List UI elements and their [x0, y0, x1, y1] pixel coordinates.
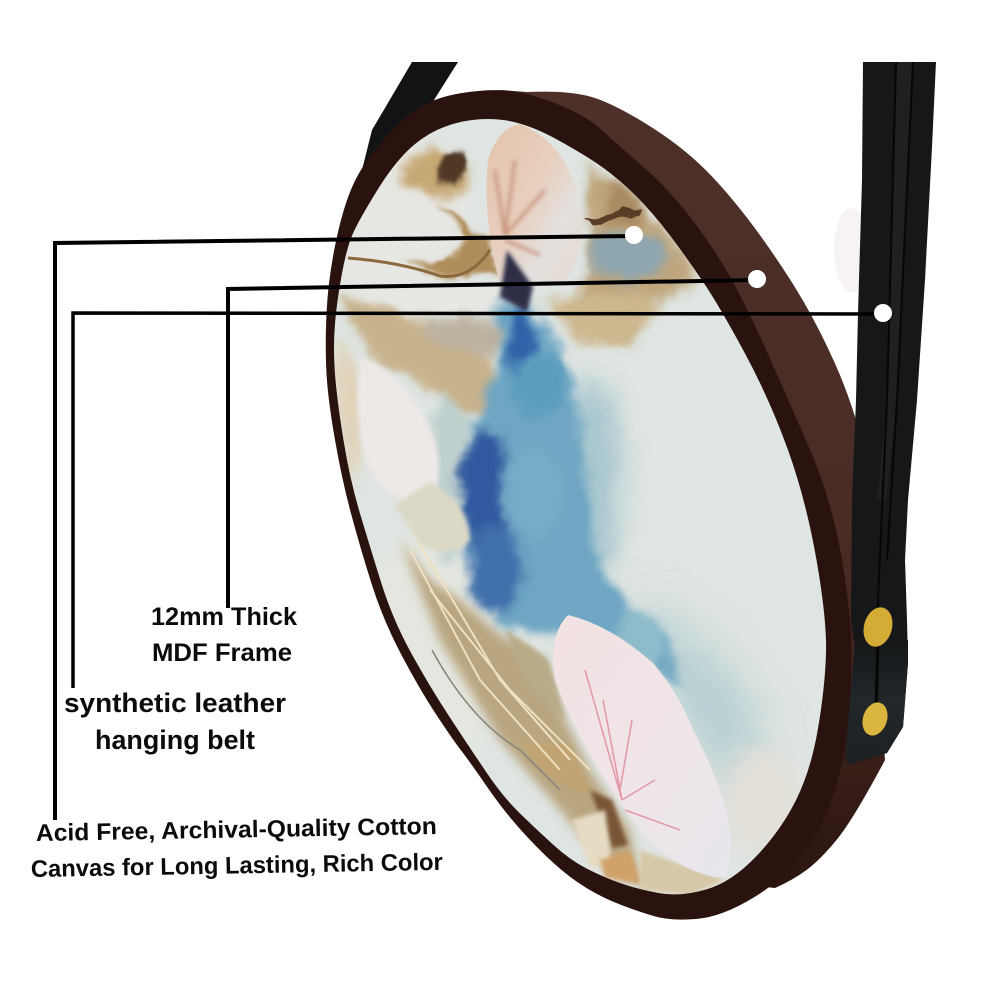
callout: cotton canvas leader	[55, 226, 643, 820]
label: MDF frame	[151, 603, 297, 667]
label: hanging belt: synthetic leather	[64, 688, 287, 718]
label: cotton canvas: Canvas for Long Lasting, Rich Color	[31, 849, 443, 883]
painted canvas	[320, 100, 840, 910]
label: MDF frame: MDF Frame	[152, 639, 292, 667]
callout: MDF frame leader	[228, 270, 766, 608]
paint: lower pink petal	[553, 615, 730, 878]
faint reflection behind belt	[834, 208, 870, 292]
label: MDF frame: 12mm Thick	[151, 603, 297, 631]
paint: mid left tan foliage	[338, 292, 515, 420]
label: hanging belt: hanging belt	[95, 725, 255, 755]
left hanging strap behind frame	[362, 62, 458, 170]
paint: pale blue wash	[640, 600, 765, 800]
icon: upper brass rivet	[859, 604, 897, 650]
paint: lower gold feathers	[400, 540, 640, 885]
label: hanging belt	[64, 688, 287, 755]
leather hanging belt	[845, 62, 936, 764]
paint: top left leaf	[400, 146, 470, 195]
label: cotton canvas	[31, 813, 443, 883]
paint: left white petal	[358, 358, 439, 502]
paint: blue stain	[462, 300, 682, 690]
paint: top pink petal	[486, 124, 582, 287]
frame front rim	[326, 90, 852, 920]
callout: leather belt leader	[73, 304, 892, 688]
wooden frame side	[500, 90, 885, 888]
label: cotton canvas: Acid Free, Archival-Quality Cotton	[36, 813, 437, 847]
icon: lower brass rivet	[858, 699, 892, 739]
paint: top right leaves	[570, 165, 695, 345]
paint: pale left washes	[338, 136, 451, 301]
infographic	[32, 62, 936, 920]
